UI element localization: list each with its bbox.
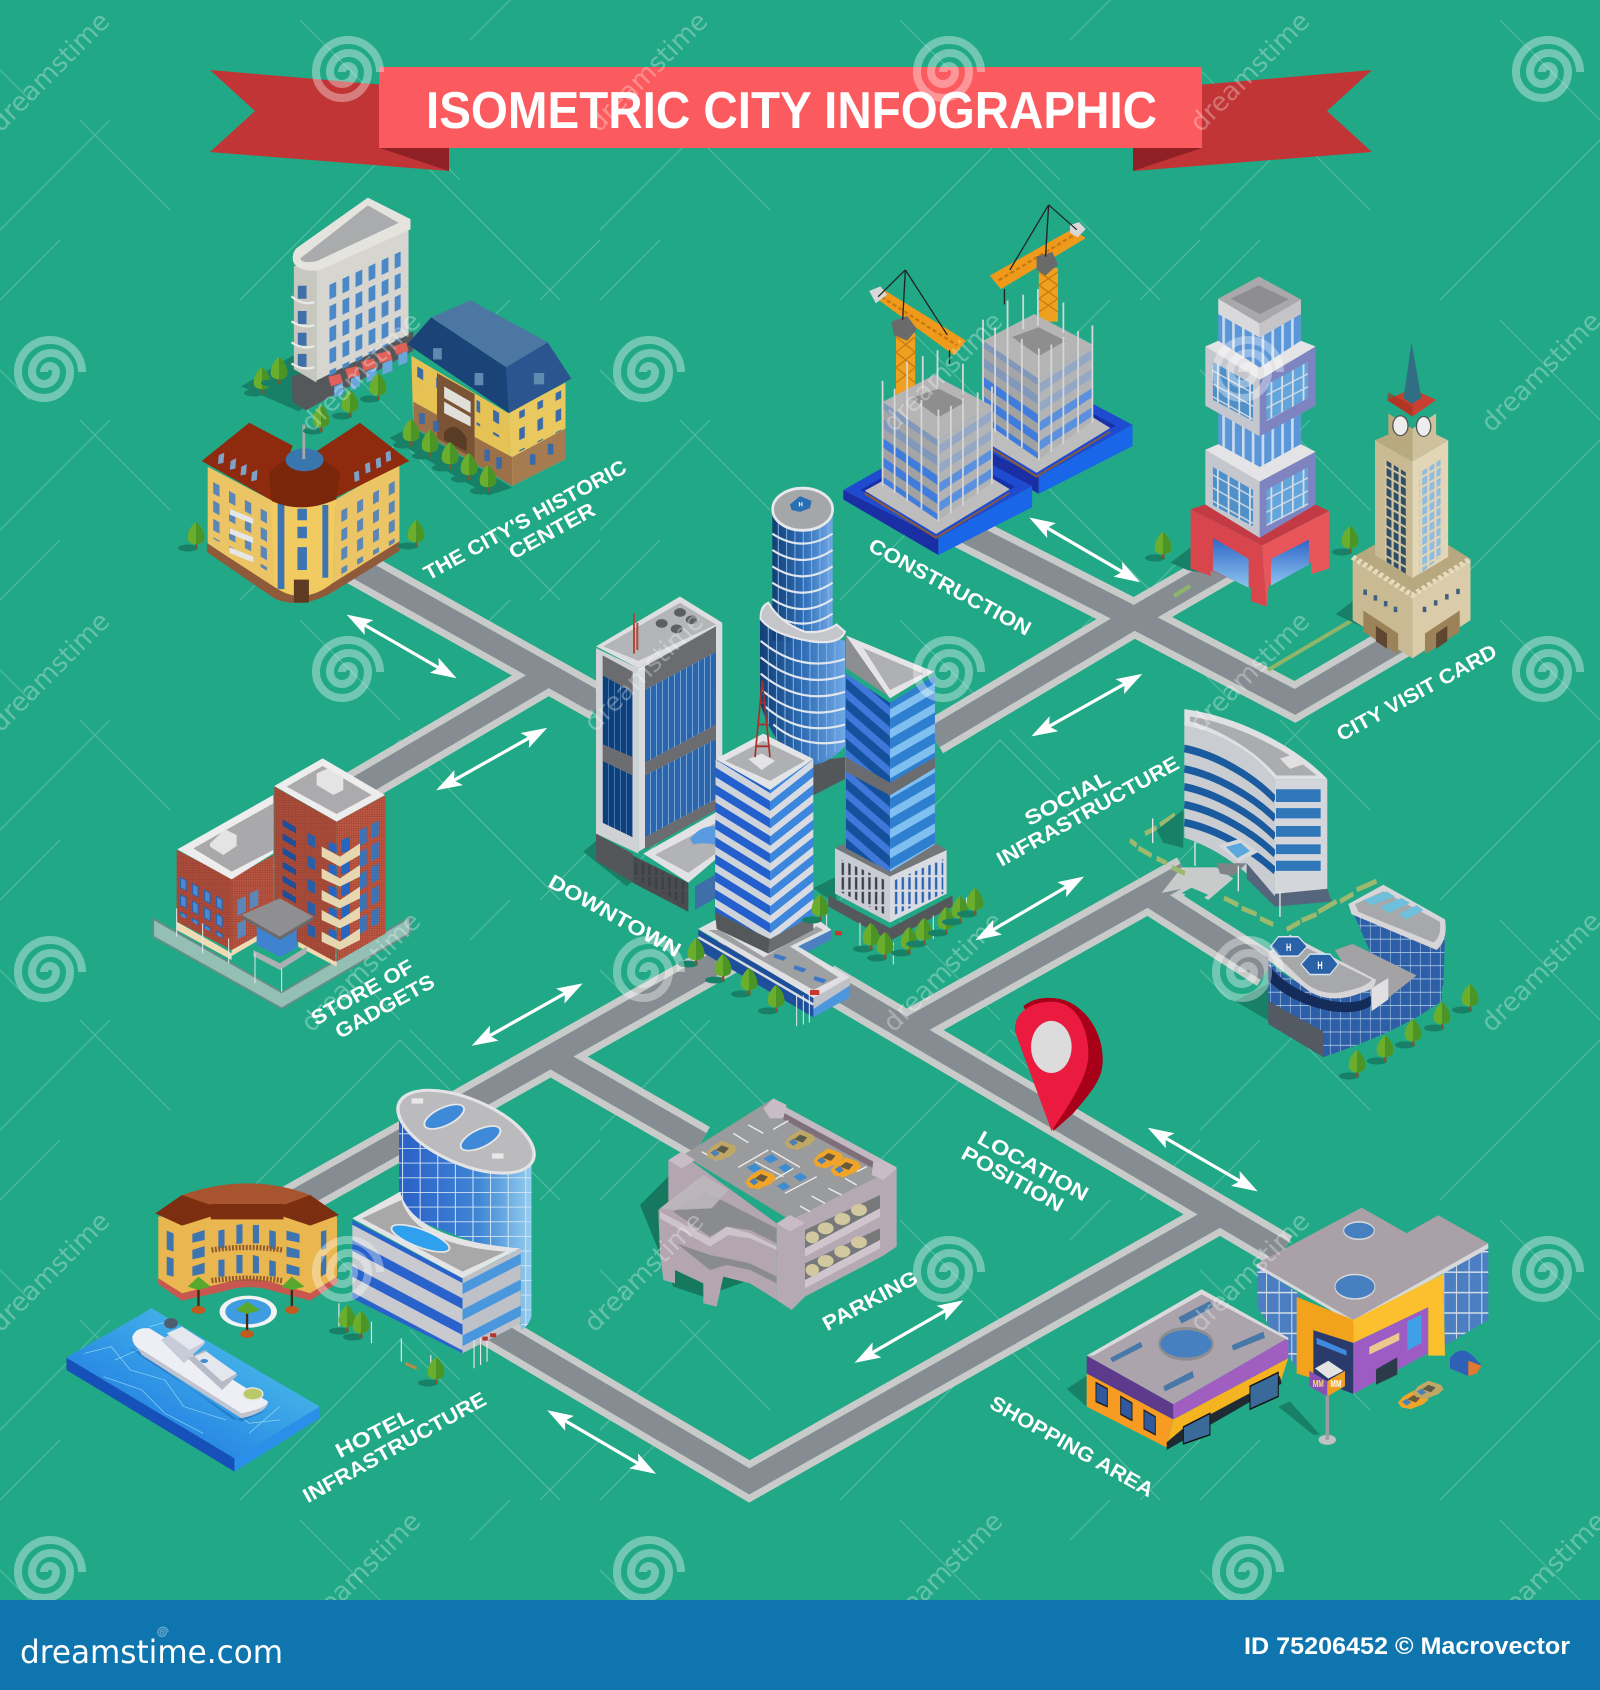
panel: parking <box>640 1098 897 1310</box>
right crane and site <box>944 205 1133 494</box>
label: center: CENTER <box>505 498 599 564</box>
water with ship <box>66 1308 320 1472</box>
heliport building: H <box>1286 942 1291 955</box>
sign post <box>1278 1361 1345 1445</box>
label: hotel: HOTEL <box>332 1404 417 1463</box>
footer credit: ID 75206452 © Macrovector <box>1244 1633 1570 1660</box>
panel: construction <box>843 205 1133 555</box>
watermark text: dreamstime <box>1185 607 1316 738</box>
trees: social <box>1339 984 1478 1080</box>
label: location: LOCATION <box>974 1126 1092 1206</box>
label: downtown: DOWNTOWN <box>544 870 685 962</box>
ribbon right tail <box>1133 70 1372 171</box>
watermark text: dreamstime <box>296 907 427 1038</box>
heliport building <box>1235 885 1446 1057</box>
label: construction: CONSTRUCTION <box>865 534 1035 640</box>
trees: historic center <box>178 357 496 552</box>
sign post: MM <box>1313 1378 1324 1390</box>
panel: the city's historic center <box>178 198 571 603</box>
skyscraper: right pyramid-roof tower <box>813 635 953 941</box>
title banner <box>210 67 1372 171</box>
label: city visit card: CITY VISIT CARD <box>1333 640 1501 746</box>
double arrows <box>350 520 1254 1472</box>
watermark text: dreamstime <box>1185 7 1316 138</box>
ribbon main <box>379 67 1202 148</box>
watermark text: dreamstime <box>878 907 1009 1038</box>
footer logo icon <box>158 1627 168 1636</box>
building: glass tower <box>1171 276 1329 607</box>
brick building <box>177 758 386 992</box>
skyscraper: left tower <box>583 597 727 912</box>
label: gadgets: GADGETS <box>331 970 439 1043</box>
oval tower hotel <box>339 1073 549 1377</box>
building: clock tower <box>1336 343 1470 658</box>
sign post: MM <box>1330 1378 1342 1390</box>
panel: hotel infrastructure <box>66 1073 549 1472</box>
watermark text: dreamstime <box>583 7 714 138</box>
panel: social infrastructure <box>1130 709 1478 1080</box>
skyscraper: cylinder tower: H <box>798 501 803 508</box>
glass fence <box>153 917 410 1008</box>
trees: visit card <box>1145 526 1358 562</box>
footer bar <box>0 1600 1600 1690</box>
skyscraper: front tower and podium <box>698 681 967 1026</box>
footer logo: dreamstime.com <box>20 1633 283 1671</box>
ribbon left tail <box>210 70 449 171</box>
panel: shopping area <box>1067 1208 1488 1450</box>
text labels <box>299 456 1501 1508</box>
label: shopping area: SHOPPING AREA <box>986 1391 1158 1502</box>
building: blue roof house <box>390 300 571 495</box>
watermark text: dreamstime <box>579 607 710 738</box>
hospital building <box>1130 709 1377 930</box>
parking shadow <box>640 1177 777 1300</box>
watermark text: dreamstime <box>579 1207 710 1338</box>
label: social: SOCIAL <box>1021 766 1114 831</box>
building: flatiron <box>241 198 413 411</box>
left crane and site <box>843 270 1032 555</box>
heliport building: H <box>1317 959 1323 972</box>
watermark text: dreamstime <box>296 307 427 438</box>
pavements <box>1174 586 1356 670</box>
watermark text: dreamstime <box>878 1507 1009 1638</box>
label: parking: PARKING <box>819 1266 922 1336</box>
label: hotel infrastructure: INFRASTRUCTURE <box>299 1388 490 1508</box>
label: position: POSITION <box>957 1142 1067 1217</box>
watermark text: dreamstime <box>296 1507 427 1638</box>
label: the city's historic center: THE CITY'S HISTORIC <box>420 456 631 585</box>
building: red roof hall <box>202 423 409 603</box>
trees: downtown <box>678 888 983 1014</box>
road network <box>287 526 1402 1481</box>
watermark text: dreamstime <box>878 307 1009 438</box>
trees: hotel <box>329 1305 444 1386</box>
location pin <box>1015 998 1103 1131</box>
panel: downtown <box>583 488 983 1026</box>
villa hotel <box>155 1183 339 1338</box>
panel: store of gadgets <box>153 758 410 1008</box>
label: store of: STORE OF <box>307 955 417 1030</box>
title: ISOMETRIC CITY INFOGRAPHIC <box>426 82 1157 140</box>
label: infrastructure: INFRASTRUCTURE <box>993 752 1183 871</box>
skyscraper: cylinder tower <box>760 488 845 795</box>
parking structure <box>658 1098 897 1310</box>
big mall <box>1257 1208 1488 1409</box>
watermark text: dreamstime <box>1185 1207 1316 1338</box>
small mall <box>1067 1289 1288 1450</box>
panel: city visit card <box>1145 276 1470 670</box>
